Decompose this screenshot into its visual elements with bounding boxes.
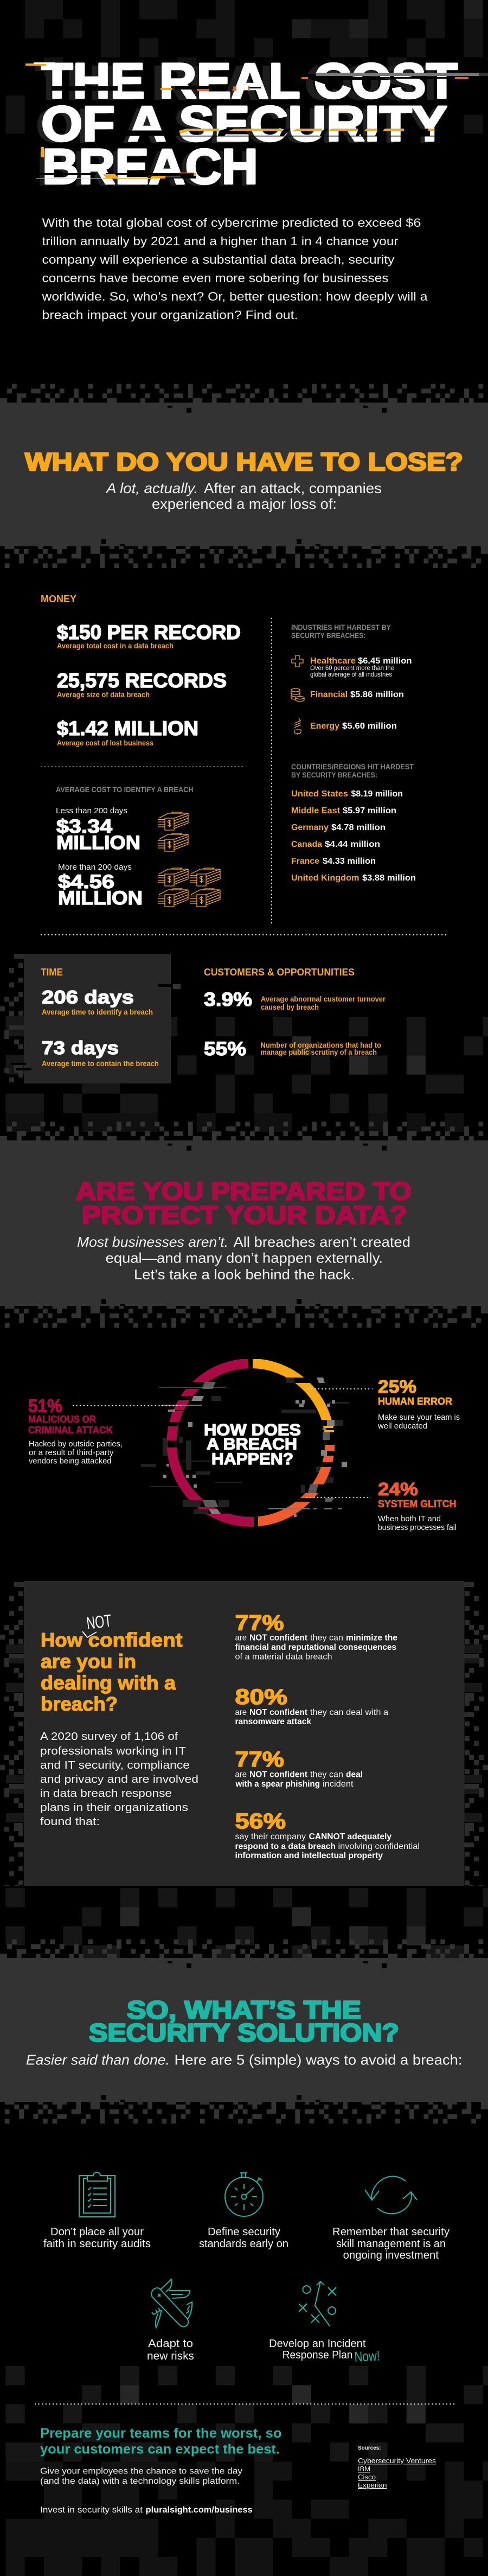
background: top pixel tiles <box>5 0 483 133</box>
heading: how not confident <box>41 1611 183 1715</box>
callout: system glitch: 24% <box>378 1479 418 1499</box>
financial: $5.86 million <box>350 690 404 699</box>
intro paragraph: breach impact your organization? Find out. <box>42 308 298 322</box>
subheading <box>26 2052 462 2068</box>
stat: public scrutiny <box>204 1038 381 1060</box>
survey description: in data breach response <box>40 1787 172 1800</box>
countries hit hardest: COUNTRIES/REGIONS HIT HARDEST <box>291 763 414 771</box>
average cost to identify a breach: AVERAGE COST TO IDENTIFY A BREACH <box>56 786 193 794</box>
intro paragraph: concerns have become even more sobering for businesses <box>42 271 388 285</box>
stat: time to contain: Average time to contain the breach <box>42 1060 159 1068</box>
closing message <box>40 2426 282 2515</box>
subheading: After an attack, companies <box>204 480 382 496</box>
stat: 77% material breach: NOT confident <box>249 1633 308 1643</box>
stat: 77% spear phishing: NOT confident <box>249 1770 308 1780</box>
average cost to identify a breach: $3.34 <box>56 816 113 837</box>
stat: 77% spear phishing: are <box>235 1770 247 1780</box>
energy: Energy <box>310 722 339 731</box>
icon: coins <box>291 688 304 701</box>
tip: adapt to new risks <box>147 2279 194 2362</box>
callout: system glitch: When both IT and <box>378 1515 441 1523</box>
callout: system glitch <box>306 1479 457 1532</box>
subheading: All breaches aren’t created <box>233 1234 410 1250</box>
icon: stopwatch <box>225 2173 263 2216</box>
tip: adapt to new risks: new risks <box>147 2350 194 2362</box>
tip: security standards <box>199 2173 288 2250</box>
heading: how not confident: breach? <box>41 1693 118 1715</box>
icon: medical cross <box>292 655 303 667</box>
callout: malicious or criminal attack: 51% <box>28 1395 62 1416</box>
countries hit hardest: United Kingdom <box>291 873 359 883</box>
icon: clipboard <box>79 2172 115 2217</box>
panel: time <box>11 954 181 1083</box>
panel: customers and opportunities: CUSTOMERS & OPPORTUNITIES <box>204 967 355 978</box>
callout: human error: HUMAN ERROR <box>378 1396 452 1407</box>
segment: human error 25% <box>253 1359 334 1432</box>
sources: Cisco <box>358 2473 376 2481</box>
countries hit hardest: $4.33 million <box>323 857 376 866</box>
tip: security audits: Don’t place all your <box>50 2226 144 2238</box>
icon: cycle arrows <box>365 2176 417 2214</box>
heading: how not confident: are you in <box>41 1650 136 1672</box>
heading: are you prepared: ARE YOU PREPARED TO <box>76 1177 412 1206</box>
stat: records: 25,575 RECORDS <box>57 669 227 692</box>
tip: security standards: standards early on <box>199 2237 288 2250</box>
icon: pocket knife <box>151 2279 192 2328</box>
stat: lost business: Average cost of lost business <box>57 739 153 747</box>
ring title <box>204 1421 301 1468</box>
average cost to identify a breach: MILLION <box>56 832 140 853</box>
panel: money <box>0 594 488 2576</box>
healthcare: Over 60 percent more than the <box>310 665 394 672</box>
sources: Experian <box>358 2481 387 2489</box>
subheading: Let’s take a look behind the hack. <box>134 1266 355 1283</box>
stat: 77% spear phishing: with a spear phishing <box>235 1780 320 1789</box>
panel: customers and opportunities <box>204 967 386 1060</box>
stat: customer turnover <box>204 989 386 1011</box>
intro paragraph: With the total global cost of cybercrime predicted to exceed $6 <box>42 216 421 229</box>
countries hit hardest: $8.19 million <box>351 789 403 799</box>
heading: are you prepared: PROTECT YOUR DATA? <box>82 1201 407 1229</box>
tip: security audits: faith in security audits <box>43 2237 151 2250</box>
stat: 56% cannot respond: involving confidential <box>338 1842 420 1851</box>
stat: lost business: $1.42 MILLION <box>57 717 198 739</box>
closing message: Give your employees the chance to save the day <box>40 2466 242 2476</box>
survey description: found that: <box>40 1815 100 1828</box>
callout: human error: 25% <box>378 1376 416 1397</box>
stat: 77% spear phishing: incident <box>323 1780 354 1789</box>
stat: customer turnover: Average abnormal customer turnover <box>261 995 386 1003</box>
energy: $5.60 million <box>342 722 397 731</box>
tip: skill management: ongoing investment <box>343 2249 439 2261</box>
stat: time to identify <box>42 987 153 1016</box>
tip: security audits <box>43 2172 151 2250</box>
tip: skill management <box>332 2176 450 2261</box>
subheading: equal—and many don’t happen externally. <box>106 1250 383 1266</box>
title: OF A SECURITY <box>35 98 442 154</box>
subheading: experienced a major loss of: <box>152 496 337 512</box>
callout: human error: well educated <box>377 1422 427 1431</box>
heading: what do you have to lose: WHAT DO YOU HAVE TO LOSE? <box>25 448 463 476</box>
pixel edge left of time panel <box>0 953 24 1083</box>
closing message: Prepare your teams for the worst, so <box>40 2426 282 2441</box>
closing message: your customers can expect the best. <box>40 2441 280 2457</box>
stat: 77% material breach: minimize the <box>346 1633 397 1643</box>
title: THE REAL COST <box>41 53 458 109</box>
callout: human error: Make sure your team is <box>378 1413 460 1422</box>
callout: system glitch: business processes fail <box>378 1523 457 1532</box>
stat: customer turnover: 3.9% <box>204 989 252 1010</box>
stat: 77% spear phishing <box>235 1748 363 1789</box>
industries hit hardest <box>291 623 412 735</box>
countries hit hardest: $5.97 million <box>343 806 396 815</box>
band: security solution <box>0 1939 488 2125</box>
average cost to identify a breach <box>56 786 220 909</box>
icon: money stacks, more than 200 days <box>158 868 220 907</box>
countries hit hardest: $4.44 million <box>325 840 380 849</box>
heading: security solution: SECURITY SOLUTION? <box>89 2018 399 2046</box>
countries hit hardest: Canada <box>291 840 322 849</box>
callout: malicious or criminal attack: vendors being attacked <box>29 1457 112 1466</box>
handwritten NOT: NOT <box>85 1611 113 1633</box>
panel: survey <box>24 1581 464 1886</box>
ring title: HAPPEN? <box>211 1450 293 1468</box>
subheading: Here are 5 (simple) ways to avoid a breach: <box>175 2052 462 2068</box>
healthcare <box>310 656 412 678</box>
stat: 56% cannot respond: information and intellectual property <box>235 1851 383 1860</box>
industries hit hardest: SECURITY BREACHES: <box>291 632 365 640</box>
icon: play diagram <box>299 2281 336 2326</box>
tip: security standards: Define security <box>208 2226 281 2238</box>
stat: time to contain <box>42 1038 159 1068</box>
survey description: plans in their organizations <box>40 1801 188 1814</box>
intro paragraph <box>41 216 428 322</box>
segment: system glitch 24% <box>258 1445 335 1527</box>
heading: how not confident: dealing with a <box>41 1672 176 1694</box>
average cost to identify a breach: $4.56 <box>58 871 114 892</box>
countries hit hardest: Germany <box>291 823 329 832</box>
background: tiles behind time section <box>5 1017 488 1132</box>
survey description <box>40 1730 198 1828</box>
sources: Cybersecurity Ventures <box>358 2457 436 2465</box>
title: BREACH <box>42 139 258 194</box>
title: OF A SECURITY <box>41 97 447 152</box>
stat: public scrutiny: manage public scrutiny of a breach <box>260 1048 377 1056</box>
chart: breach causes ring <box>141 1363 349 1522</box>
subheading: Easier said than done. <box>26 2052 170 2068</box>
tip: skill management: skill management is an <box>336 2237 446 2250</box>
stat: 77% spear phishing: 77% <box>235 1748 284 1771</box>
stat: 56% cannot respond: CANNOT adequately <box>309 1832 391 1841</box>
stat: 56% cannot respond <box>235 1809 420 1860</box>
callout: system glitch: SYSTEM GLITCH <box>378 1499 457 1509</box>
survey description: A 2020 survey of 1,106 of <box>40 1730 178 1743</box>
title <box>25 53 488 196</box>
stat: time to contain: 73 days <box>42 1038 119 1059</box>
pixel edges of survey panel <box>0 1581 488 1886</box>
stat: 77% spear phishing: deal <box>346 1770 363 1780</box>
heading: security solution: SO, WHAT’S THE <box>127 1995 361 2024</box>
stat: 77% material breach: are <box>235 1633 247 1643</box>
financial: Financial <box>310 690 348 699</box>
survey description: and privacy and are involved <box>40 1773 198 1786</box>
stat: time to identify: Average time to identify a breach <box>42 1008 153 1016</box>
average cost to identify a breach: MILLION <box>58 888 143 909</box>
stat: 56% cannot respond: 56% <box>235 1809 286 1833</box>
icon: money stacks, less than 200 days <box>158 812 188 851</box>
closing message: Invest in security skills at <box>40 2505 143 2515</box>
segment: malicious 51% <box>167 1359 254 1527</box>
intro paragraph: company will experience a substantial data breach, security <box>42 253 395 266</box>
ring title: HOW DOES <box>204 1421 301 1439</box>
tip: skill management: Remember that security <box>332 2226 450 2238</box>
stat: 80% ransomware <box>235 1685 388 1726</box>
stat: 77% material breach: of a material data breach <box>235 1653 332 1661</box>
heading: how not confident: confident <box>88 1629 183 1651</box>
stat: time to identify: 206 days <box>42 987 134 1008</box>
stat: customer turnover: caused by breach <box>261 1003 319 1011</box>
heading: are you prepared <box>76 1177 412 1229</box>
callout: malicious or criminal attack <box>28 1395 181 1466</box>
stat: 80% ransomware: NOT confident <box>249 1708 308 1717</box>
countries hit hardest <box>291 763 416 883</box>
countries hit hardest: $4.78 million <box>331 823 386 832</box>
countries hit hardest: Middle East <box>291 806 340 815</box>
subheading <box>105 480 382 512</box>
caret <box>82 1631 97 1637</box>
stat: 80% ransomware: are <box>235 1708 247 1717</box>
stat: 77% spear phishing: they can <box>310 1770 343 1780</box>
intro paragraph: trillion annually by 2021 and a higher than 1 in 4 chance your <box>42 234 399 248</box>
icon: energy bulb <box>294 718 301 735</box>
stat: 80% ransomware: they can deal with a <box>310 1708 388 1717</box>
stat: public scrutiny: Number of organizations that had to <box>260 1041 381 1049</box>
stat: 56% cannot respond: say their company <box>235 1832 306 1841</box>
callout: malicious or criminal attack: Hacked by outside parties, <box>29 1440 123 1449</box>
stat: 77% material breach <box>235 1611 397 1661</box>
healthcare: Healthcare <box>310 656 356 666</box>
sources: Sources: <box>358 2445 381 2451</box>
tip: adapt to new risks: Adapt to <box>148 2337 193 2350</box>
countries hit hardest: BY SECURITY BREACHES: <box>291 771 377 779</box>
subheading: A lot, actually. <box>105 480 198 496</box>
callout: malicious or criminal attack: MALICIOUS OR <box>28 1414 96 1425</box>
callout: malicious or criminal attack: CRIMINAL ATTACK <box>28 1425 113 1436</box>
countries hit hardest: United States <box>291 789 348 799</box>
stat: 56% cannot respond: respond to a data breach <box>235 1842 336 1851</box>
intro paragraph: worldwide. So, who’s next? Or, better question: how deeply will a <box>41 290 428 303</box>
ring title: A BREACH <box>207 1436 297 1453</box>
heading: how not confident: How <box>41 1629 83 1651</box>
stat: records: Average size of data breach <box>57 691 150 699</box>
panel: time: TIME <box>41 967 63 978</box>
stat: 80% ransomware: ransomware attack <box>235 1717 311 1726</box>
tip: incident response plan: Response Plan <box>282 2349 352 2361</box>
background: footer tiles <box>5 2366 488 2576</box>
stat: per record: Average total cost in a data breach <box>57 642 174 650</box>
stat: 77% material breach: they can <box>310 1633 343 1643</box>
financial <box>310 690 404 699</box>
survey description: professionals working in IT <box>40 1745 187 1757</box>
stat: 80% ransomware: 80% <box>235 1685 287 1709</box>
title: THE REAL COST <box>34 55 446 111</box>
industries hit hardest: INDUSTRIES HIT HARDEST BY <box>291 623 391 632</box>
closing message: (and the data) with a technology skills platform. <box>40 2477 240 2486</box>
tip: incident response plan <box>269 2281 380 2365</box>
average cost to identify a breach: Less than 200 days <box>56 806 127 815</box>
countries hit hardest: $3.88 million <box>362 873 416 883</box>
callout: malicious or criminal attack: or a result of third-party <box>29 1449 114 1457</box>
healthcare: $6.45 million <box>358 656 412 666</box>
handwritten now: Now! <box>354 2348 380 2365</box>
sources <box>358 2445 436 2489</box>
average cost to identify a breach: More than 200 days <box>58 863 132 872</box>
energy <box>310 722 397 731</box>
background: tiles below survey panel <box>5 1888 488 1984</box>
stat: 77% material breach: 77% <box>235 1611 284 1635</box>
heading: security solution <box>89 1995 399 2046</box>
tip: incident response plan: Develop an Incident <box>269 2337 366 2350</box>
callout: human error <box>307 1376 460 1431</box>
stat: 77% material breach: financial and reputational consequences <box>235 1643 396 1652</box>
band: are you prepared <box>0 1121 488 1329</box>
stat: per record: $150 PER RECORD <box>57 621 241 643</box>
stat: public scrutiny: 55% <box>204 1038 246 1060</box>
healthcare: global average of all industries <box>310 672 392 678</box>
money heading: MONEY <box>41 594 76 604</box>
subheading <box>77 1234 410 1283</box>
closing message: pluralsight.com/business <box>146 2505 253 2515</box>
sources: IBM <box>358 2465 370 2473</box>
survey description: and IT security, compliance <box>40 1759 190 1771</box>
countries hit hardest: France <box>291 857 319 866</box>
band: what do you have to lose <box>0 383 488 569</box>
title: BREACH <box>36 141 253 196</box>
subheading: Most businesses aren’t. <box>77 1234 228 1250</box>
